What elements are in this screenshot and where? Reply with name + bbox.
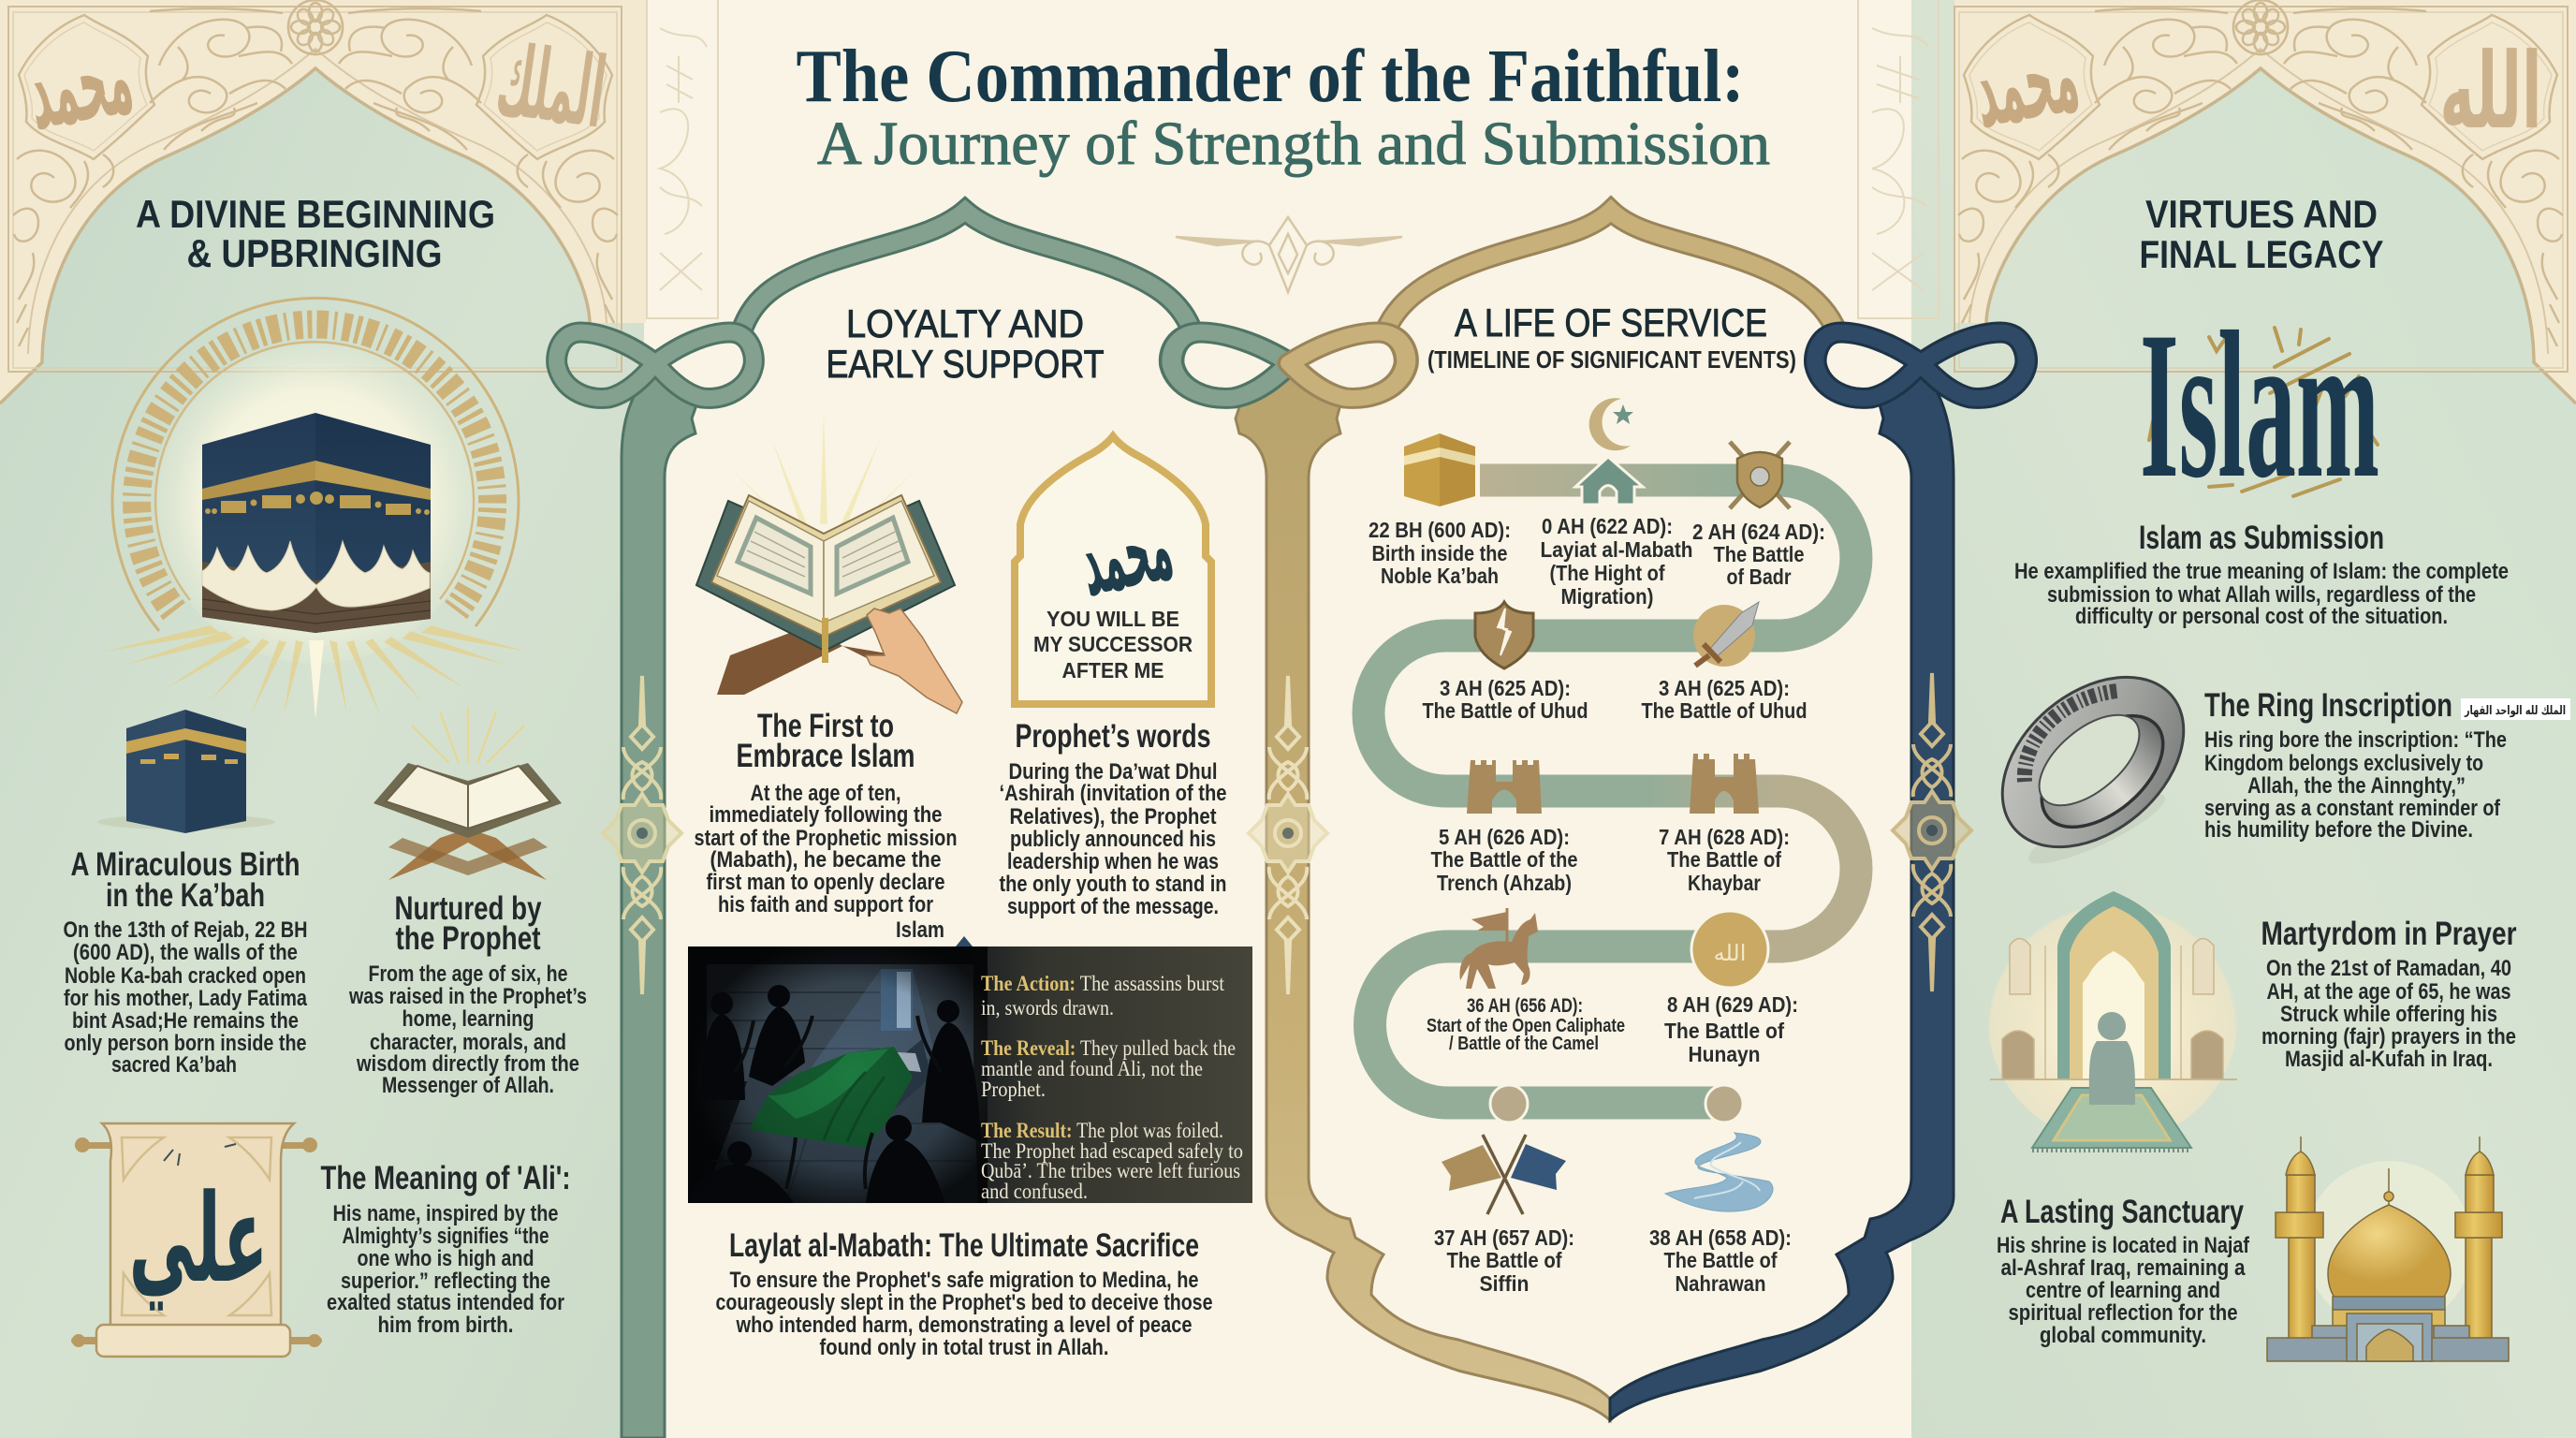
scene illustration: [688, 946, 988, 1203]
heading and text: the ultimate sacrifice: [715, 1227, 1213, 1360]
icon: house of migration: [1575, 457, 1643, 505]
heading and text: martyrdom in prayer: Masjid al-Kufah in Iraq.: [2285, 1047, 2493, 1072]
heading and text: first to embrace Islam: his faith and support for: [718, 892, 933, 917]
heading and text: nurtured by the Prophet: character, morals, and: [370, 1030, 566, 1055]
heading and text: the ultimate sacrifice: found only in total trust in Allah.: [820, 1335, 1108, 1360]
heading and text: first to embrace Islam: first man to openly declare: [706, 870, 945, 895]
scene caption text: [981, 972, 1243, 1203]
ornament: navy band medallion: [1893, 673, 1971, 991]
section heading: [2140, 192, 2383, 276]
ribbon knot: green: [557, 332, 754, 398]
text: ring inscription: His ring bore the inscription: “The: [2204, 727, 2507, 753]
labels: third timeline row: Khaybar: [1688, 871, 1761, 895]
scene caption text: The Reveal: They pulled back the: [981, 1036, 1236, 1060]
heading and text: a lasting sanctuary: [1997, 1194, 2250, 1348]
labels: first timeline row: (The Hight of: [1550, 561, 1665, 585]
icon: crescent and star: [1589, 398, 1633, 450]
heading and text: the ultimate sacrifice: To ensure the Prophet's safe migration to Medina, he: [730, 1268, 1198, 1293]
calligraphic Islam wordmark: [2140, 287, 2379, 521]
heading and text: nurtured by the Prophet: wisdom directly from the: [356, 1051, 579, 1077]
ribbon band: navy right: [1610, 367, 1954, 1420]
section heading: & UPBRINGING: [187, 231, 442, 275]
labels: third timeline row: Trench (Ahzab): [1437, 871, 1572, 895]
heading and text: Prophet's words: ‘Ashirah (invitation of the: [1000, 781, 1226, 806]
labels: fifth timeline row: Nahrawan: [1676, 1271, 1765, 1296]
icon: shield and swords: [1730, 442, 1790, 508]
labels: second timeline row: 3 AH (625 AD):: [1659, 676, 1790, 700]
text: ring inscription: serving as a constant reminder of: [2204, 796, 2501, 821]
heading and text: meaning of Ali: superior.” reflecting the: [341, 1269, 550, 1294]
heading and text: a lasting sanctuary: His shrine is located in Najaf: [1997, 1233, 2250, 1258]
text: ring inscription: his humility before the Divine.: [2204, 817, 2473, 843]
scene caption text: The Action: The assassins burst: [981, 972, 1225, 995]
labels: third timeline row: 7 AH (628 AD):: [1659, 825, 1790, 849]
labels: third timeline row: The Battle of the: [1430, 847, 1578, 872]
ribbon: gold arch of timeline panel: [1383, 211, 1839, 339]
labels: fifth timeline row: 37 AH (657 AD):: [1434, 1225, 1574, 1250]
heading and text: meaning of Ali: exalted status intended for: [327, 1290, 564, 1315]
scene caption text: Prophet.: [981, 1078, 1046, 1101]
scene caption text: The Prophet had escaped safely to: [981, 1139, 1243, 1163]
labels: fourth timeline row: The Battle of: [1664, 1019, 1784, 1043]
labels: fourth timeline row: Start of the Open Caliphate: [1427, 1016, 1625, 1036]
heading and text: first to embrace Islam: [695, 708, 957, 943]
timeline nodes: [1490, 1085, 1743, 1123]
ornament: green band medallion: [603, 676, 681, 994]
heading and text: Prophet's words: support of the message.: [1007, 894, 1219, 919]
icon: gold medallion with calligraphy: [1691, 911, 1768, 988]
scene caption text: and confused.: [981, 1180, 1088, 1203]
heading and text: Prophet's words: publicly announced his: [1010, 827, 1216, 852]
heading and text: martyrdom in prayer: Martyrdom in Prayer: [2261, 916, 2517, 952]
icon: small Ka'bah: [97, 710, 275, 833]
section heading: A DIVINE BEGINNING: [136, 192, 495, 236]
labels: third timeline row: The Battle of: [1667, 847, 1781, 872]
heading and text: first to embrace Islam: (Mabath), he became the: [710, 847, 942, 873]
section heading: LOYALTY AND: [846, 301, 1084, 345]
callout: successor arch: [1015, 436, 1211, 704]
icon: broken shield: [1475, 602, 1533, 668]
icon: river: [1665, 1133, 1773, 1211]
heading and text: miraculous birth: sacred Ka’bah: [111, 1052, 237, 1078]
heading and text: nurtured by the Prophet: From the age of six, he: [369, 961, 567, 987]
panel: divine beginning and upbringing: [0, 0, 646, 1438]
heading and text: Prophet's words: During the Da’wat Dhul: [1009, 759, 1217, 785]
heading and text: the ultimate sacrifice: Laylat al-Mabath: The Ultimate Sacrifice: [729, 1227, 1199, 1264]
labels: first timeline row: of Badr: [1726, 565, 1792, 589]
calligraphy: Muhammad, right panel: محمد: [1965, 11, 2087, 153]
icon: castle, Battle of the Trench: [1467, 760, 1542, 814]
section heading: [136, 192, 495, 275]
heading and text: martyrdom in prayer: morning (fajr) prayers in the: [2261, 1024, 2516, 1049]
scene caption text: The Result: The plot was foiled.: [981, 1119, 1223, 1142]
heading and text: miraculous birth: only person born inside the: [64, 1031, 307, 1056]
icon: sword over gold disc: [1693, 602, 1759, 667]
serpentine timeline path: [1368, 480, 1856, 1103]
labels: fourth timeline row: / Battle of the Camel: [1449, 1034, 1599, 1054]
icon: parchment scroll with name Ali: علي: [129, 1167, 268, 1311]
icon: crossed flags: [1442, 1135, 1566, 1214]
heading and text: first to embrace Islam: Embrace Islam: [736, 738, 915, 774]
illustrated panel: assassins and green mantle: [688, 946, 1252, 1203]
text: ring inscription: Allah, the the Ainnghty,”: [2247, 773, 2466, 799]
labels: first timeline row: 0 AH (622 AD):: [1542, 514, 1673, 538]
ribbon knot: green and gold: [1172, 332, 1406, 398]
section heading: (TIMELINE OF SIGNIFICANT EVENTS): [1427, 345, 1796, 374]
section heading: [1427, 301, 1796, 374]
title: The Commander of the Faithful:: [796, 36, 1745, 118]
icon: parchment scroll with name Ali: [71, 1123, 322, 1357]
heading and text: Prophet's words: the only youth to stand in: [1000, 872, 1226, 897]
labels: third timeline row: [1430, 825, 1790, 895]
labels: first timeline row: 2 AH (624 AD):: [1692, 520, 1825, 544]
heading and text: martyrdom in prayer: [2261, 916, 2517, 1072]
heading and text: miraculous birth: (600 AD), the walls of the: [73, 940, 298, 965]
heading and text: Islam as submission: [2014, 520, 2509, 629]
heading and text: Islam as submission: submission to what Allah wills, regardless of the: [2047, 582, 2476, 608]
calligraphy: Al-Malik, right spandrel: الملك: [490, 22, 612, 151]
heading and text: meaning of Ali: [320, 1160, 571, 1338]
labels: first timeline row: 22 BH (600 AD):: [1368, 518, 1511, 542]
icon: figure praying in mosque niche: [1987, 891, 2238, 1151]
labels: first timeline row: Migration): [1561, 584, 1653, 609]
heading and text: Islam as submission: difficulty or personal cost of the situation.: [2075, 604, 2448, 629]
heading and text: miraculous birth: for his mother, Lady Fatima: [64, 986, 308, 1011]
labels: second timeline row: The Battle of Uhud: [1642, 698, 1807, 723]
labels: first timeline row: Noble Ka’bah: [1381, 564, 1499, 588]
heading and text: miraculous birth: bint Asad;He remains the: [72, 1008, 299, 1034]
ornament: gold band medallion: [1249, 676, 1327, 994]
heading and text: nurtured by the Prophet: home, learning: [402, 1006, 534, 1032]
scene caption text: in, swords drawn.: [981, 996, 1114, 1020]
section heading: VIRTUES AND: [2145, 192, 2378, 236]
heading and text: miraculous birth: Noble Ka-bah cracked open: [65, 963, 306, 989]
heading: ring inscription: The Ring Inscription: [2204, 687, 2452, 724]
heading and text: the ultimate sacrifice: who intended harm, demonstrating a level of peace: [736, 1313, 1193, 1338]
pointer triangle: [956, 936, 973, 946]
panel: virtues and final legacy: [1911, 0, 2576, 1438]
labels: first timeline row: Layiat al-Mabath: [1541, 537, 1692, 562]
ribbon band: gold middle: [1236, 367, 1610, 1420]
heading and text: martyrdom in prayer: On the 21st of Ramadan, 40: [2266, 956, 2511, 981]
heading and text: martyrdom in prayer: Struck while offering his: [2280, 1002, 2497, 1027]
labels: third timeline row: 5 AH (626 AD):: [1439, 825, 1570, 849]
icon: horse with banner: [1460, 908, 1538, 989]
panel: a life of service timeline: [1368, 301, 1856, 1296]
panel backdrop: decorative vertical strips beside title: [647, 0, 1939, 318]
heading and text: miraculous birth: A Miraculous Birth: [71, 846, 300, 883]
callout: successor arch: MY SUCCESSOR: [1033, 632, 1193, 656]
heading and text: first to embrace Islam: start of the Prophetic mission: [695, 826, 957, 851]
icon: gold medallion with calligraphy: الله: [1714, 940, 1746, 966]
section heading: A LIFE OF SERVICE: [1455, 301, 1767, 345]
heading and text: the ultimate sacrifice: courageously slept in the Prophet's bed to deceive those: [715, 1290, 1213, 1315]
labels: fifth timeline row: Siffin: [1479, 1271, 1530, 1296]
heading and text: Prophet's words: Relatives), the Prophet: [1009, 804, 1217, 829]
scene caption text: Qubā’. The tribes were left furious: [981, 1159, 1240, 1182]
heading and text: meaning of Ali: His name, inspired by the: [333, 1201, 558, 1226]
panel: loyalty and early support: [688, 301, 1252, 1360]
labels: fourth timeline row: [1427, 992, 1798, 1066]
calligraphy: Muhammad, left spandrel: محمد: [19, 13, 141, 154]
labels: second timeline row: [1423, 676, 1807, 723]
title: [796, 36, 1770, 178]
heading and text: miraculous birth: On the 13th of Rejab, 22 BH: [64, 917, 307, 943]
heading and text: meaning of Ali: him from birth.: [378, 1313, 513, 1338]
callout: successor arch: YOU WILL BE: [1046, 607, 1179, 631]
text: ring inscription: [2204, 727, 2507, 843]
text: ring inscription: Kingdom belongs exclusively to: [2204, 751, 2483, 776]
icon: small open Quran on stand: [373, 707, 562, 880]
ribbon band: green left: [622, 370, 697, 1438]
heading and text: a lasting sanctuary: centre of learning and: [2026, 1278, 2220, 1303]
heading and text: Prophet's words: [1000, 718, 1226, 919]
labels: first timeline row: [1368, 514, 1825, 609]
labels: fifth timeline row: The Battle of: [1447, 1248, 1562, 1272]
icon: open Quran with hand: [696, 413, 962, 713]
icon: gold Ka'bah: [1404, 433, 1475, 506]
heading and text: martyrdom in prayer: AH, at the age of 65, he was: [2267, 979, 2510, 1005]
labels: fourth timeline row: 8 AH (629 AD):: [1667, 992, 1798, 1017]
calligraphy: Allah, right panel: الله: [2439, 32, 2542, 153]
heading and text: first to embrace Islam: immediately following the: [710, 802, 942, 828]
Arabic inscription label: [2461, 698, 2570, 720]
ribbon: green arch of loyalty panel: [739, 211, 1194, 339]
labels: fourth timeline row: 36 AH (656 AD):: [1467, 995, 1583, 1017]
title: A Journey of Strength and Submission: [817, 110, 1770, 178]
labels: fourth timeline row: Hunayn: [1689, 1042, 1760, 1066]
labels: second timeline row: The Battle of Uhud: [1423, 698, 1588, 723]
labels: fifth timeline row: [1434, 1225, 1792, 1296]
heading and text: nurtured by the Prophet: was raised in the Prophet’s: [348, 984, 587, 1009]
ribbon knot: navy: [1815, 332, 2027, 398]
heading and text: Islam as submission: Islam as Submission: [2139, 520, 2384, 556]
labels: first timeline row: Birth inside the: [1372, 541, 1507, 565]
scene caption text: mantle and found Ali, not the: [981, 1057, 1203, 1080]
heading and text: a lasting sanctuary: al-Ashraf Iraq, remaining a: [2001, 1255, 2246, 1281]
heading and text: nurtured by the Prophet: the Prophet: [395, 920, 541, 957]
heading and text: a lasting sanctuary: A Lasting Sanctuary: [2000, 1194, 2244, 1230]
ornament: title flourish: [1176, 217, 1402, 292]
section heading: FINAL LEGACY: [2140, 232, 2383, 276]
callout: successor arch: AFTER ME: [1061, 658, 1164, 682]
heading and text: meaning of Ali: Almighty’s signifies “the: [343, 1224, 549, 1249]
labels: second timeline row: 3 AH (625 AD):: [1440, 676, 1571, 700]
heading and text: Prophet's words: leadership when he was: [1007, 849, 1219, 874]
heading and text: Prophet's words: Prophet’s words: [1015, 718, 1211, 755]
labels: fifth timeline row: 38 AH (658 AD):: [1649, 1225, 1792, 1250]
labels: first timeline row: The Battle: [1713, 542, 1805, 566]
heading and text: first to embrace Islam: At the age of ten,: [751, 781, 900, 806]
callout: successor arch: محمد: [1070, 488, 1181, 619]
heading and text: miraculous birth: [64, 846, 308, 1078]
heading and text: a lasting sanctuary: spiritual reflection for the: [2009, 1300, 2237, 1326]
heading and text: nurtured by the Prophet: [348, 890, 587, 1098]
heading and text: meaning of Ali: one who is high and: [358, 1246, 534, 1271]
section heading: EARLY SUPPORT: [826, 342, 1105, 386]
icon: castle, Battle of Khaybar: [1690, 754, 1759, 814]
heading and text: a lasting sanctuary: global community.: [2040, 1323, 2206, 1348]
heading and text: nurtured by the Prophet: Messenger of Allah.: [382, 1073, 554, 1098]
heading and text: first to embrace Islam: Islam: [896, 917, 944, 943]
heading and text: meaning of Ali: The Meaning of 'Ali':: [320, 1160, 571, 1196]
heading and text: first to embrace Islam: The First to: [757, 708, 894, 744]
icon: Ka'bah with calligraphic halo: [104, 298, 527, 719]
icon: golden shrine: [2267, 1137, 2509, 1361]
labels: fifth timeline row: The Battle of: [1664, 1248, 1778, 1272]
section heading: [826, 301, 1105, 386]
heading and text: nurtured by the Prophet: Nurtured by: [395, 890, 542, 927]
icon: silver ring: [1969, 643, 2217, 881]
heading and text: miraculous birth: in the Ka’bah: [106, 877, 265, 914]
